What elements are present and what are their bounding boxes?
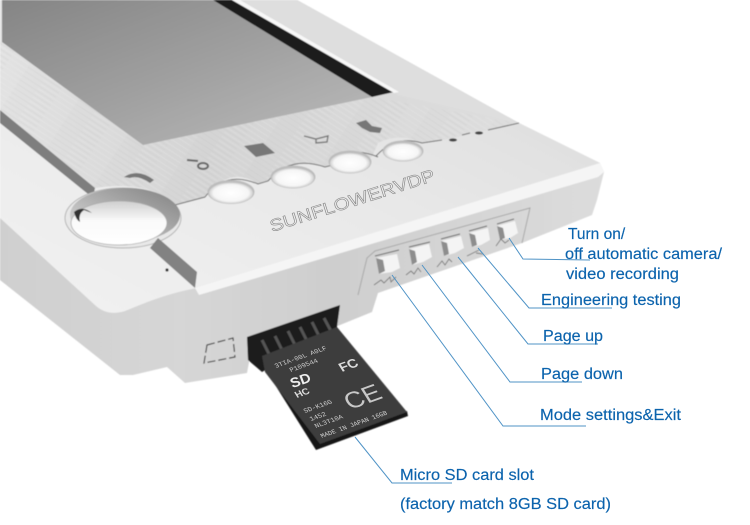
brand name: SUNFLOWERVDP [267, 166, 437, 236]
label: page up: Page up [543, 328, 603, 345]
brushed metal plate [0, 0, 519, 205]
side button 4 [469, 226, 490, 247]
menu button 2 [270, 166, 316, 188]
icon: media [244, 143, 275, 157]
label: page down: Page down [541, 366, 623, 383]
card printed text: P109544 [288, 358, 320, 374]
menu button 1 [208, 180, 254, 204]
label: mode settings and exit: Mode settings&Exit [540, 407, 682, 424]
device body [0, 0, 604, 450]
SD card slot icon [204, 338, 235, 363]
icon: note [304, 136, 328, 143]
microphone hole [165, 268, 169, 272]
card printed text: MADE IN JAPAN 16GB [319, 410, 389, 440]
screen slit highlight [232, 0, 399, 93]
leader line: page up [458, 257, 598, 344]
leader line: recording [509, 238, 590, 260]
card bottom thickness [267, 372, 408, 450]
card printed text: SD [287, 371, 315, 391]
label: turn on off recording: Turn on/ [568, 226, 626, 243]
label: factory match note: (factory match 8GB SD card) [400, 496, 611, 513]
card printed text: FC [336, 356, 361, 374]
side button 2 [409, 242, 432, 265]
card printed text: SD-K16G [302, 399, 334, 415]
side button 3 [441, 234, 464, 256]
card body [262, 327, 407, 444]
leader line: engineering testing [478, 248, 612, 308]
screen black slit [213, 0, 394, 97]
grey bevel strip lower [150, 238, 197, 288]
card printed text: NL3T10A [313, 414, 346, 430]
label: turn on off recording: video recording [566, 266, 679, 283]
leader line: page down [422, 265, 582, 382]
menu button 3 [328, 150, 372, 174]
icon: mute [356, 120, 382, 133]
card printed text: HC [293, 387, 312, 400]
grey bevel strip upper [0, 110, 95, 198]
card printed text: 1452 [308, 411, 328, 423]
card slot and contacts [247, 305, 340, 372]
leader line: mode settings [392, 275, 586, 426]
label: turn on off recording [565, 226, 723, 283]
main call button [65, 188, 181, 248]
label: micro SD card slot: Micro SD card slot [400, 467, 535, 484]
side button 1 [375, 250, 400, 274]
indicator dots [449, 131, 483, 142]
card printed text: 3TIA-00L A0LF [273, 345, 329, 370]
label: turn on off recording: off automatic camera/ [565, 246, 723, 263]
display screen [2, 0, 372, 145]
side button 5 [497, 219, 518, 240]
icon: phone [124, 173, 154, 183]
menu button 4 [382, 140, 424, 162]
device body side face [0, 0, 604, 383]
face edge highlight band [195, 163, 604, 295]
leader line: SD card [355, 437, 452, 483]
top bezel highlight [232, 0, 519, 123]
device front face [0, 0, 600, 313]
side button markings [374, 239, 509, 285]
side button panel [358, 208, 530, 295]
card printed text: CE [339, 380, 387, 415]
label: engineering testing: Engineering testing [541, 292, 681, 309]
card printed text [273, 345, 389, 440]
icon: key [187, 160, 208, 169]
